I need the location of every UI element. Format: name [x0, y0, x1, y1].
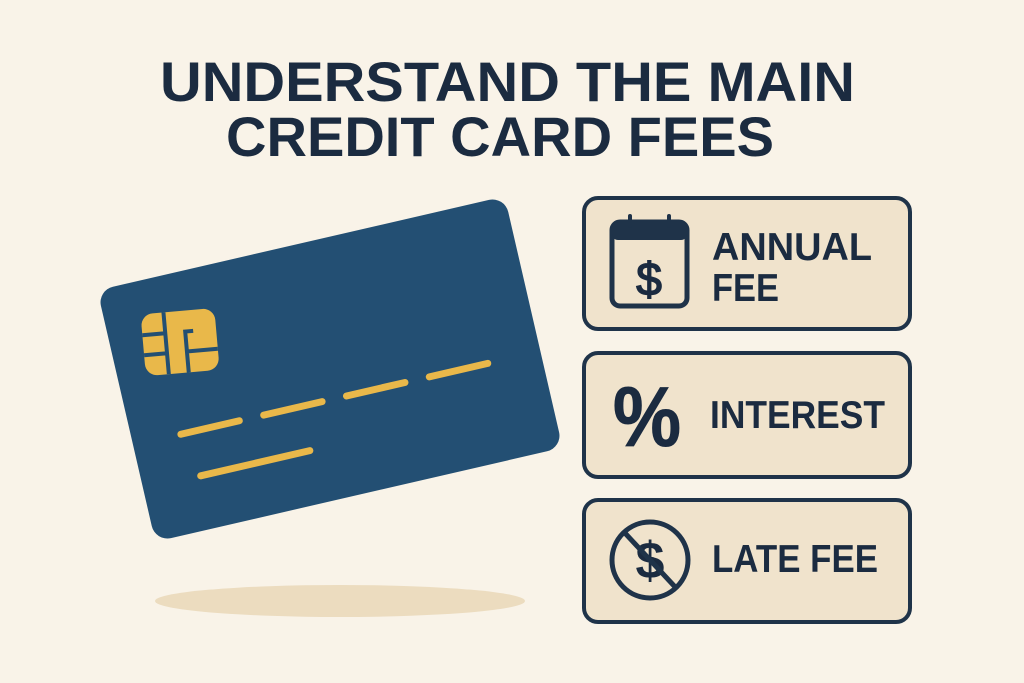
icon: no dollar	[612, 522, 688, 598]
panel: annual fee	[584, 198, 910, 329]
chip	[141, 308, 220, 376]
panel: late fee: LATE FEE	[712, 538, 878, 581]
title	[160, 50, 855, 168]
icon: percent: %	[613, 370, 681, 464]
panel: late fee	[584, 500, 910, 622]
icon: calendar dollar	[612, 216, 687, 306]
card shadow	[155, 585, 525, 617]
panel: interest: INTEREST	[710, 394, 885, 437]
panel: annual fee: ANNUAL	[712, 226, 872, 269]
card number dashes	[181, 363, 498, 478]
title: UNDERSTAND THE MAIN	[160, 50, 855, 113]
panel: annual fee: FEE	[712, 267, 779, 310]
credit card	[97, 196, 563, 542]
icon: no dollar: $	[636, 532, 665, 590]
icon: calendar dollar: $	[636, 253, 662, 305]
panel: interest	[584, 353, 910, 477]
title: CREDIT CARD FEES	[226, 105, 774, 168]
